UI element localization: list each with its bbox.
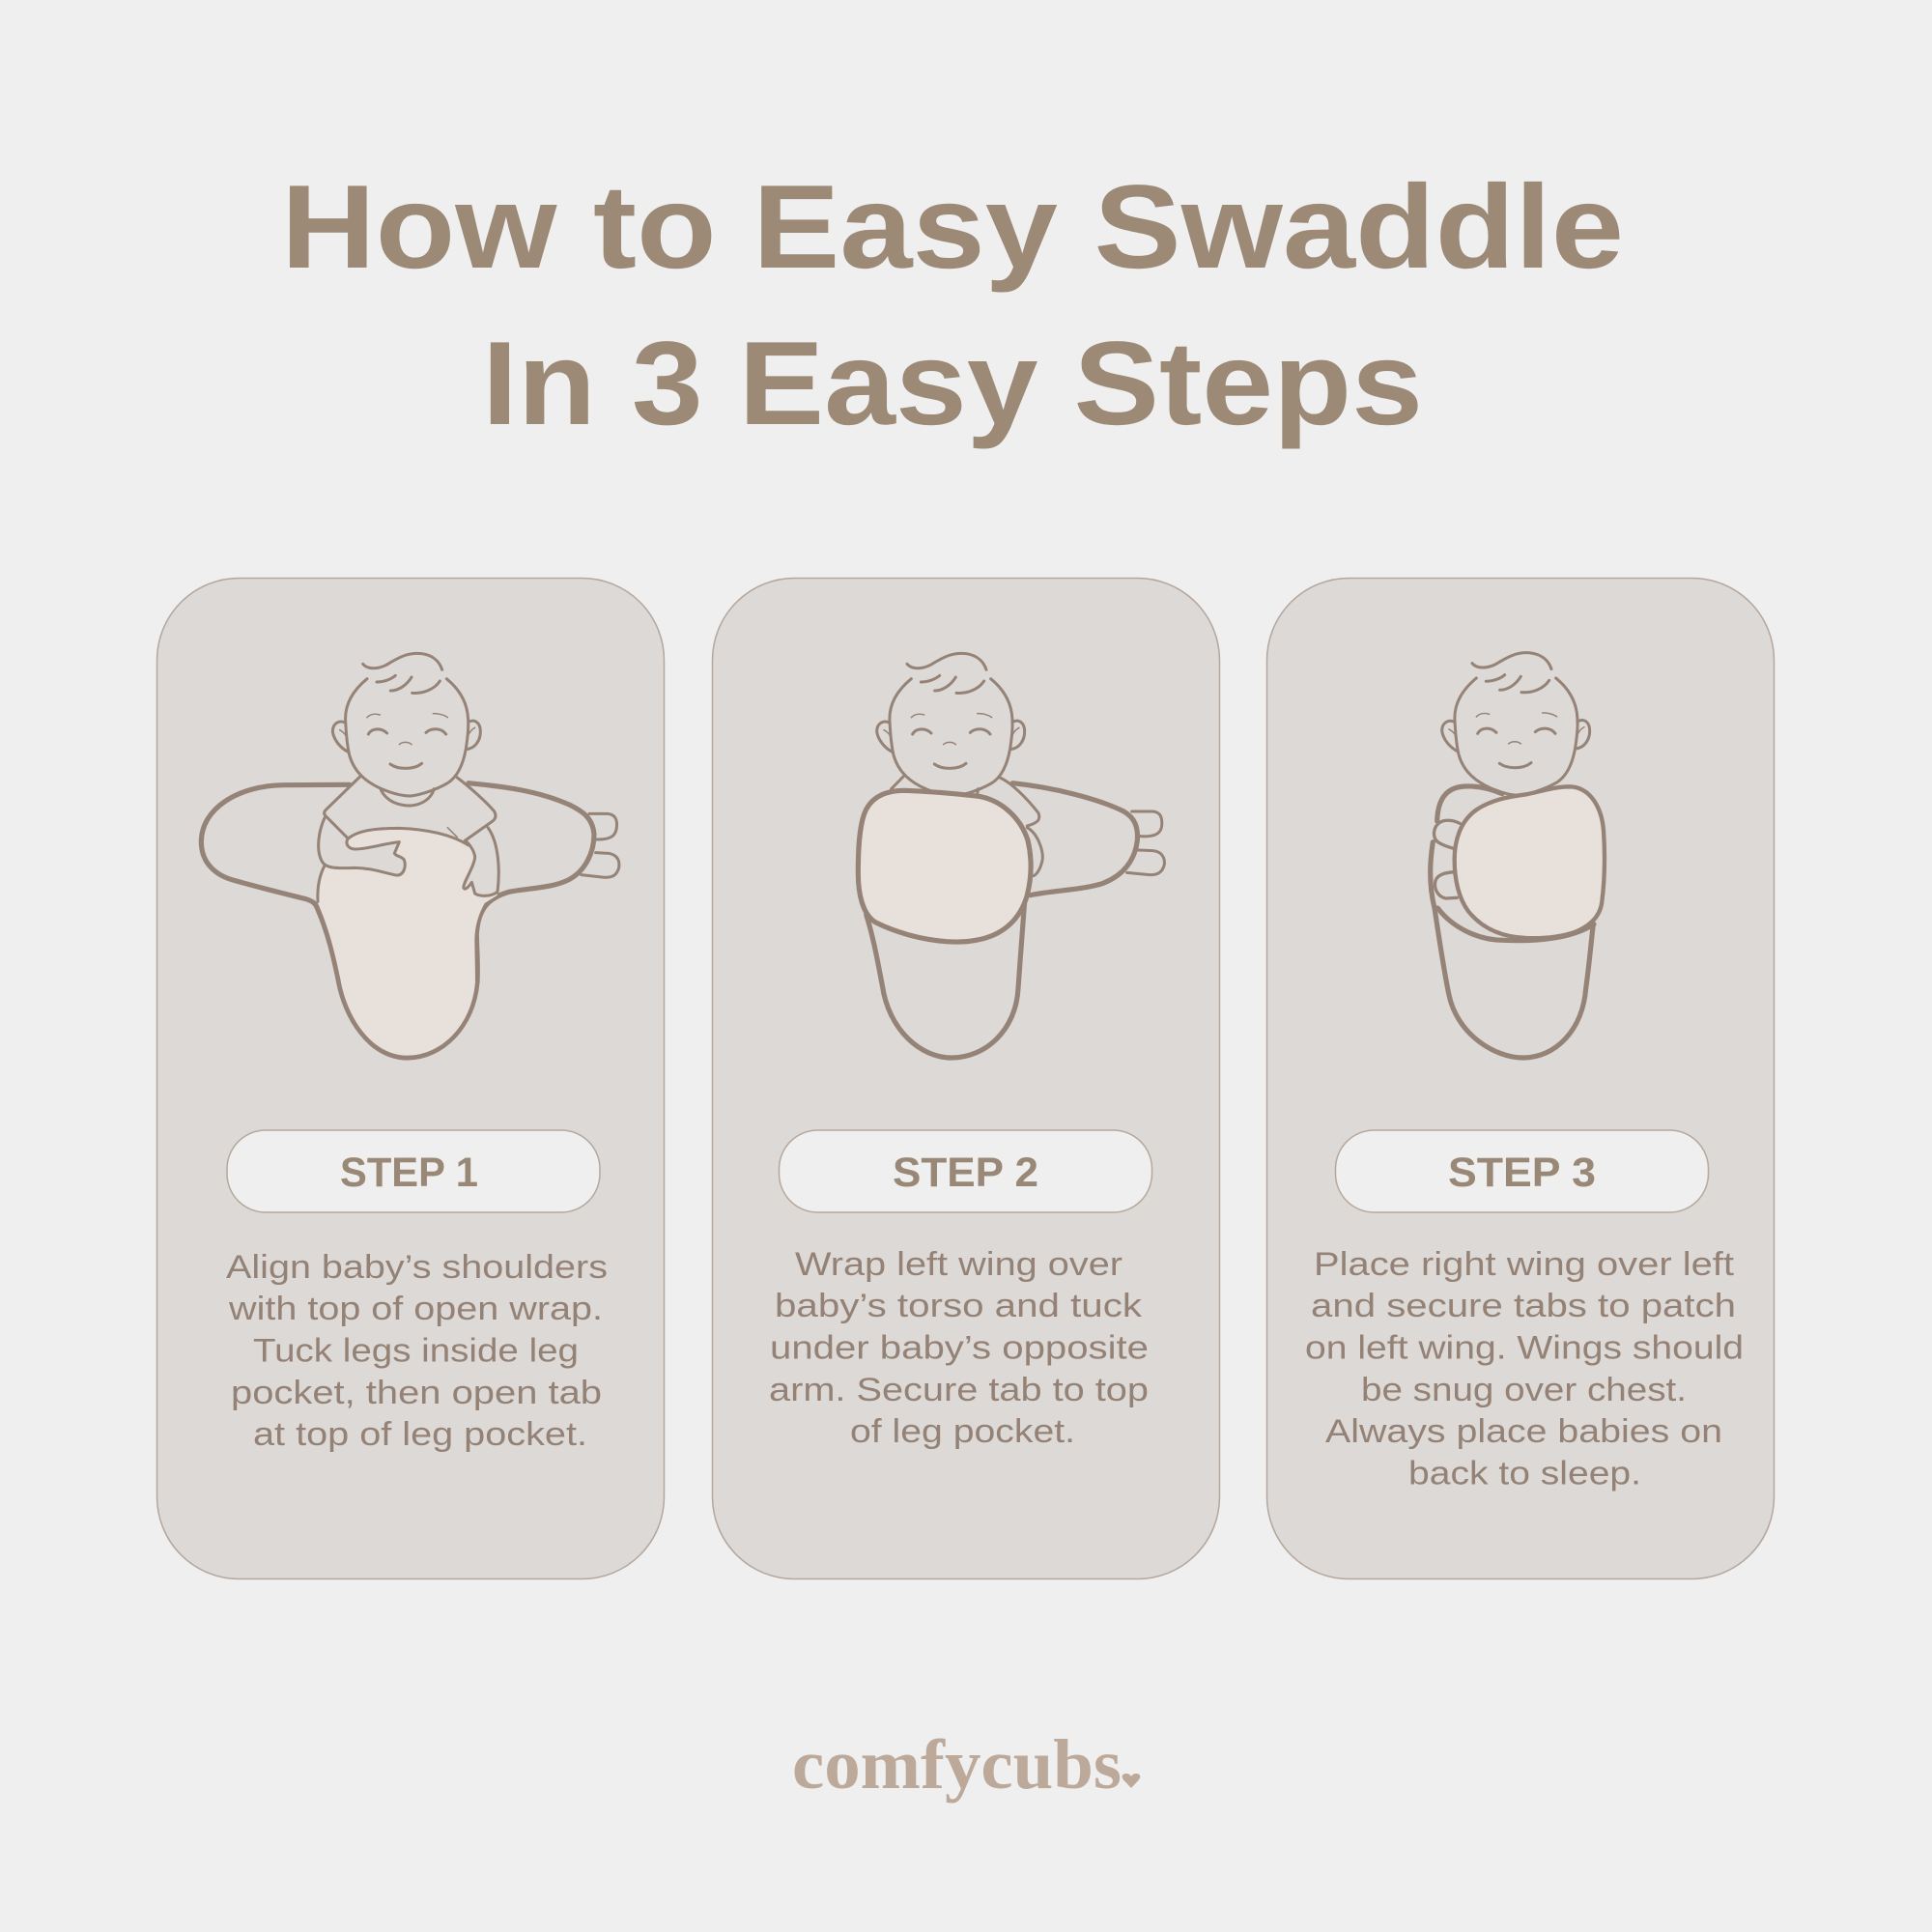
step 1 description: pocket, then open tab <box>231 1375 602 1411</box>
step 3 description: back to sleep. <box>1408 1455 1641 1492</box>
step 1 description: Tuck legs inside leg <box>253 1333 579 1370</box>
step 2 description: baby’s torso and tuck <box>775 1288 1143 1324</box>
head <box>877 653 1025 796</box>
step 3 description: Place right wing over left <box>1314 1246 1735 1283</box>
title <box>281 161 1624 450</box>
step 2 pill: STEP 2 <box>893 1150 1038 1196</box>
step 2 description <box>769 1246 1149 1450</box>
step 2 description: of leg pocket. <box>850 1413 1075 1450</box>
step 3 description: and secure tabs to patch <box>1311 1288 1736 1324</box>
step 2 description: under baby’s opposite <box>770 1329 1149 1366</box>
logo: comfycubs: comfycubs <box>792 1725 1122 1804</box>
step 3 pill: STEP 3 <box>1448 1150 1596 1196</box>
step 1 description <box>226 1249 608 1453</box>
step 3 description: on left wing. Wings should <box>1305 1329 1744 1366</box>
step 3 description: Always place babies on <box>1325 1413 1722 1450</box>
icon: heart <box>1122 1774 1140 1788</box>
wrap body <box>858 777 1164 1058</box>
panel: step 3 <box>1267 578 1774 1578</box>
panel: step 1 <box>156 578 665 1578</box>
step 1 pill: STEP 1 <box>340 1150 478 1196</box>
step 2 description: Wrap left wing over <box>795 1246 1122 1283</box>
step 3 description: be snug over chest. <box>1361 1372 1687 1408</box>
head <box>1442 653 1590 795</box>
illustration: left wing wrapped over torso <box>858 653 1164 1058</box>
step 1 description: Align baby’s shoulders <box>226 1249 608 1286</box>
panel: step 2 <box>713 578 1219 1578</box>
step 1 description: with top of open wrap. <box>228 1291 603 1327</box>
step 3 description <box>1305 1246 1744 1492</box>
illustration: right wing secured over left <box>1431 653 1605 1058</box>
step 1 description: at top of leg pocket. <box>253 1416 587 1453</box>
title: How to Easy Swaddle <box>281 161 1624 294</box>
step 2 pill <box>779 1130 1151 1212</box>
illustration: baby on open swaddle wrap <box>201 653 619 1058</box>
wrap body <box>1431 784 1605 1058</box>
step 3 pill <box>1335 1130 1708 1212</box>
step 2 description: arm. Secure tab to top <box>769 1372 1149 1408</box>
step 1 pill <box>227 1130 600 1212</box>
title: In 3 Easy Steps <box>482 318 1423 450</box>
